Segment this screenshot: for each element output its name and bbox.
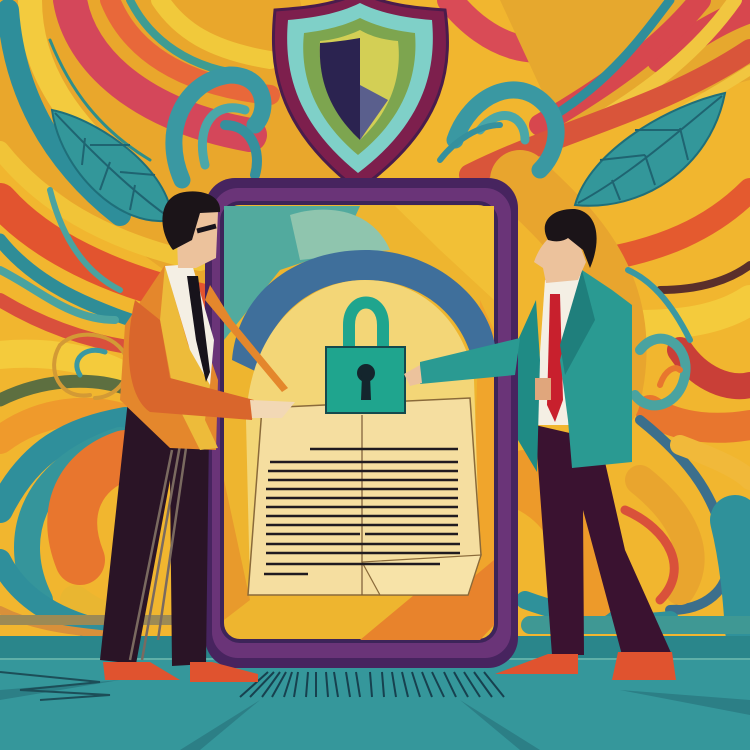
shirt and tie (165, 264, 214, 385)
floor rays (240, 672, 504, 697)
teal leaf right (575, 93, 725, 206)
shield (273, 0, 447, 190)
jacket (120, 265, 218, 450)
teal curls right (440, 90, 556, 170)
document (248, 398, 481, 595)
man left (100, 191, 295, 682)
padlock (326, 302, 405, 413)
shoes (103, 662, 180, 680)
device frame (205, 178, 518, 668)
floor (0, 636, 750, 750)
arm (420, 338, 520, 384)
head (534, 232, 586, 283)
shoes (495, 654, 578, 674)
document text lines (264, 449, 460, 574)
left smoke swirls (0, 190, 128, 398)
screen colour patches (224, 206, 494, 640)
arms (129, 300, 254, 420)
shirt and tie (535, 272, 585, 425)
trousers (535, 425, 672, 655)
teal curls left (174, 75, 263, 180)
trousers (100, 400, 209, 666)
man right (404, 209, 676, 680)
arch (232, 250, 495, 372)
head (177, 205, 218, 268)
teal leaf left (52, 110, 172, 221)
right smoke swirls (628, 270, 690, 405)
jacket (518, 300, 540, 472)
